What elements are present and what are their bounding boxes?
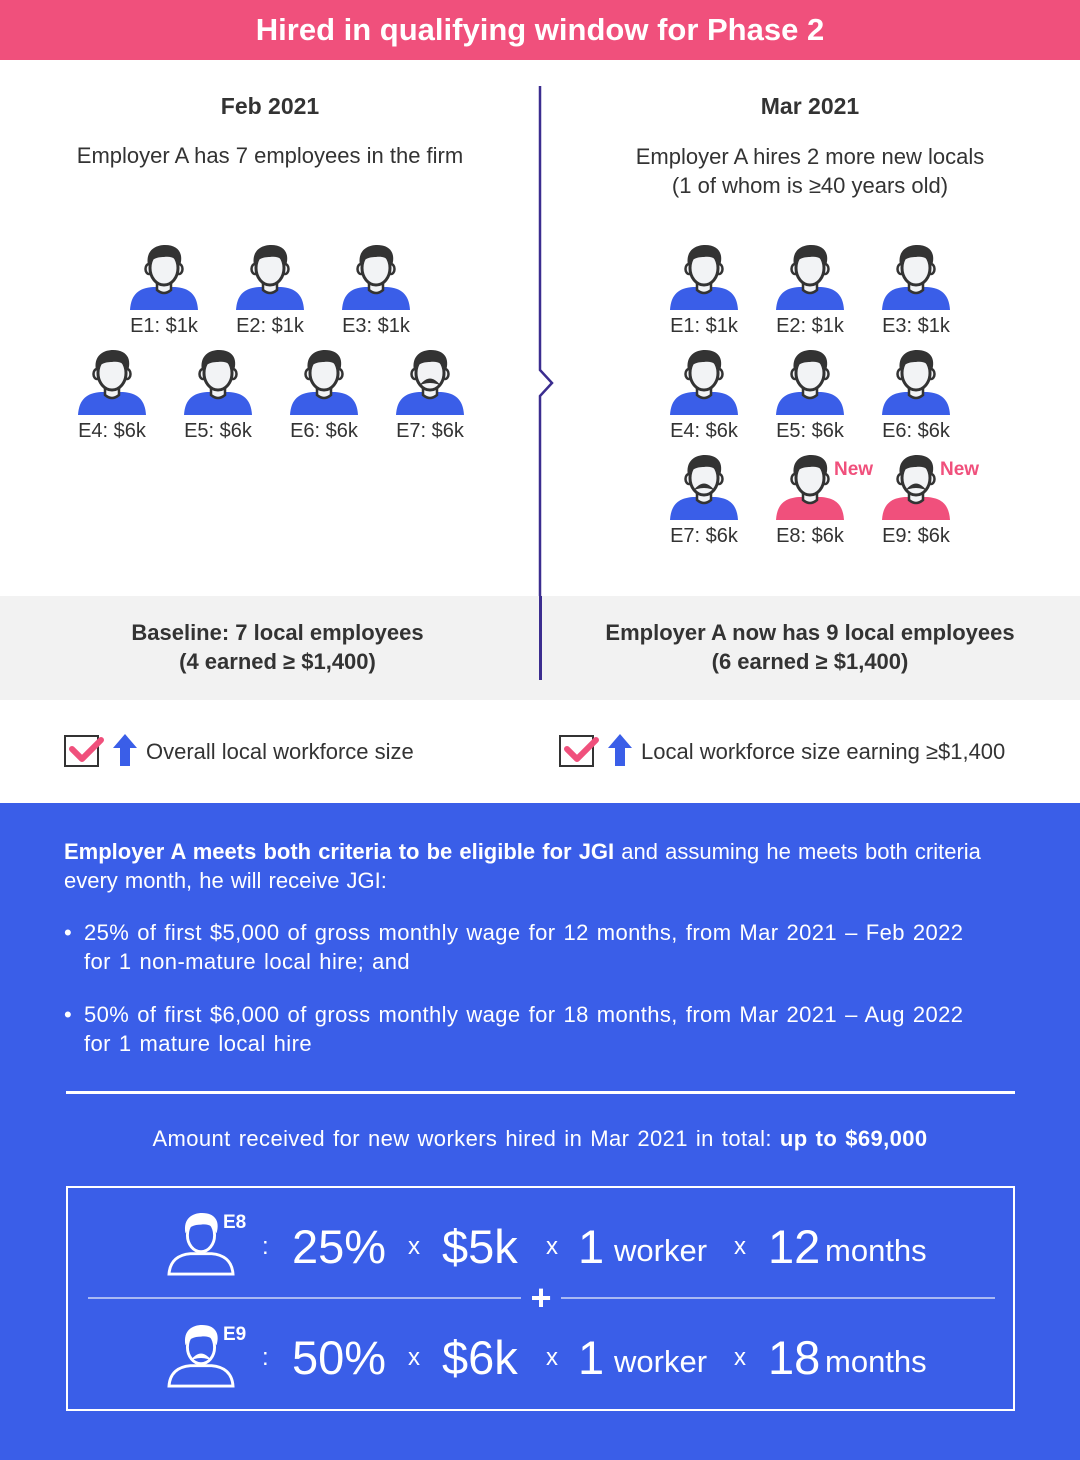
people group: Mar: E3: $1k: [882, 315, 950, 337]
bullet 2: for 1 mature local hire: [84, 1031, 312, 1056]
row E9: x: [734, 1344, 746, 1371]
text: now has 9: [605, 620, 1015, 674]
row E9: :: [262, 1344, 269, 1371]
panel: Mar 2021: [636, 93, 984, 198]
divider line with chevron: [538, 86, 554, 596]
icon: check + arrow: [559, 734, 632, 767]
text: employer A 7 employees: Employer A has 7 employees in the firm: [77, 143, 463, 168]
row E8: 1: [578, 1220, 604, 1273]
people group: Feb: E3: $1k: [342, 315, 410, 337]
bullet 1: for 1 non-mature local hire; and: [84, 949, 410, 974]
people group: Feb: E4: $6k: [78, 420, 146, 442]
people group: Feb: E2: $1k: [236, 315, 304, 337]
people group: Feb: [78, 245, 464, 442]
people group: Mar: E8: $6k: [776, 525, 844, 547]
people group: Mar: E6: $6k: [882, 420, 950, 442]
row E9: x: [546, 1344, 558, 1371]
bullet 1: 25% of first $5,000 of gross monthly wage for 12 months, from Mar 2021 – Feb 2022: [84, 920, 963, 945]
text: now has 9: Employer A now has 9 local employees: [605, 620, 1015, 645]
heading: Feb 2021: Feb 2021: [221, 93, 319, 119]
people group: Mar: E5: $6k: [776, 420, 844, 442]
text: baseline: Baseline: 7 local employees: [131, 620, 424, 645]
row E9: 50%: [292, 1331, 386, 1384]
criterion 1: [64, 734, 414, 767]
text: baseline: [131, 620, 424, 674]
plus sign: +: [530, 1277, 552, 1318]
icon: check + arrow: [64, 734, 137, 767]
title: Hired in qualifying window for Phase 2: [256, 12, 824, 47]
people group: Mar: New: [834, 459, 873, 480]
text: eligibility: every month, he will receive JGI:: [64, 868, 387, 893]
text: eligibility: Employer A meets both criteria to be eligible for JGI and assuming he meets both criteria: [64, 839, 981, 864]
gray band: [0, 596, 1080, 700]
text: hires 2 more: Employer A hires 2 more new locals: [636, 144, 984, 169]
row E9: x: [408, 1344, 420, 1371]
people group: Mar: E1: $1k: [670, 315, 738, 337]
bullet 2: 50% of first $6,000 of gross monthly wage for 18 months, from Mar 2021 – Aug 2022: [84, 1002, 963, 1027]
text: eligibility: [64, 839, 981, 893]
bullet 1: •: [64, 920, 72, 945]
people group: Mar: E7: $6k: [670, 525, 738, 547]
row E8: $5k: [442, 1220, 518, 1273]
text: baseline: (4 earned ≥ $1,400): [179, 649, 376, 674]
people group: Mar: E9: $6k: [882, 525, 950, 547]
icon: E8: [167, 1213, 235, 1276]
row E9: $6k: [442, 1331, 518, 1384]
panel: Feb 2021: [77, 93, 463, 168]
text: total amount: Amount received for new workers hired in Mar 2021 in total: up to $69,000: [152, 1126, 928, 1151]
bullet 1: [64, 920, 963, 974]
people group: Feb: E1: $1k: [130, 315, 198, 337]
row E9: [167, 1324, 927, 1388]
row E8: 12: [768, 1220, 820, 1273]
criterion 2: [559, 734, 1005, 767]
heading: Mar 2021: Mar 2021: [761, 93, 859, 119]
criterion 2: Local workforce size earning ≥$1,400: [641, 739, 1005, 764]
bullet 2: [64, 1002, 963, 1056]
panel: blue summary: [0, 803, 1080, 1460]
text: now has 9: (6 earned ≥ $1,400): [712, 649, 908, 674]
row E9: 18: [768, 1331, 820, 1384]
people group: Mar: New: [940, 459, 979, 480]
people group: Feb: E5: $6k: [184, 420, 252, 442]
row E8: x: [546, 1233, 558, 1260]
people group: Feb: E7: $6k: [396, 420, 464, 442]
formula box: [66, 1186, 1015, 1411]
icon: E9: [167, 1325, 235, 1388]
row E8: [167, 1212, 927, 1276]
row E8: E8: [223, 1212, 246, 1233]
row E8: x: [408, 1233, 420, 1260]
bullet 2: •: [64, 1002, 72, 1027]
row E8: :: [262, 1233, 269, 1260]
row E8: months: [825, 1233, 927, 1268]
text: hires 2 more: (1 of whom is ≥40 years old): [672, 173, 948, 198]
people group: Mar: [670, 245, 979, 547]
row E9: worker: [614, 1344, 707, 1379]
row E9: E9: [223, 1324, 246, 1345]
text: hires 2 more: [636, 144, 984, 198]
people group: Feb: E6: $6k: [290, 420, 358, 442]
row E9: 1: [578, 1331, 604, 1384]
row E9: months: [825, 1344, 927, 1379]
row E8: x: [734, 1233, 746, 1260]
title: [0, 0, 1080, 60]
row E8: 25%: [292, 1220, 386, 1273]
people group: Mar: E2: $1k: [776, 315, 844, 337]
criterion 1: Overall local workforce size: [146, 739, 414, 764]
divider overlay on band: [539, 596, 542, 680]
people group: Mar: E4: $6k: [670, 420, 738, 442]
row E8: worker: [614, 1233, 707, 1268]
